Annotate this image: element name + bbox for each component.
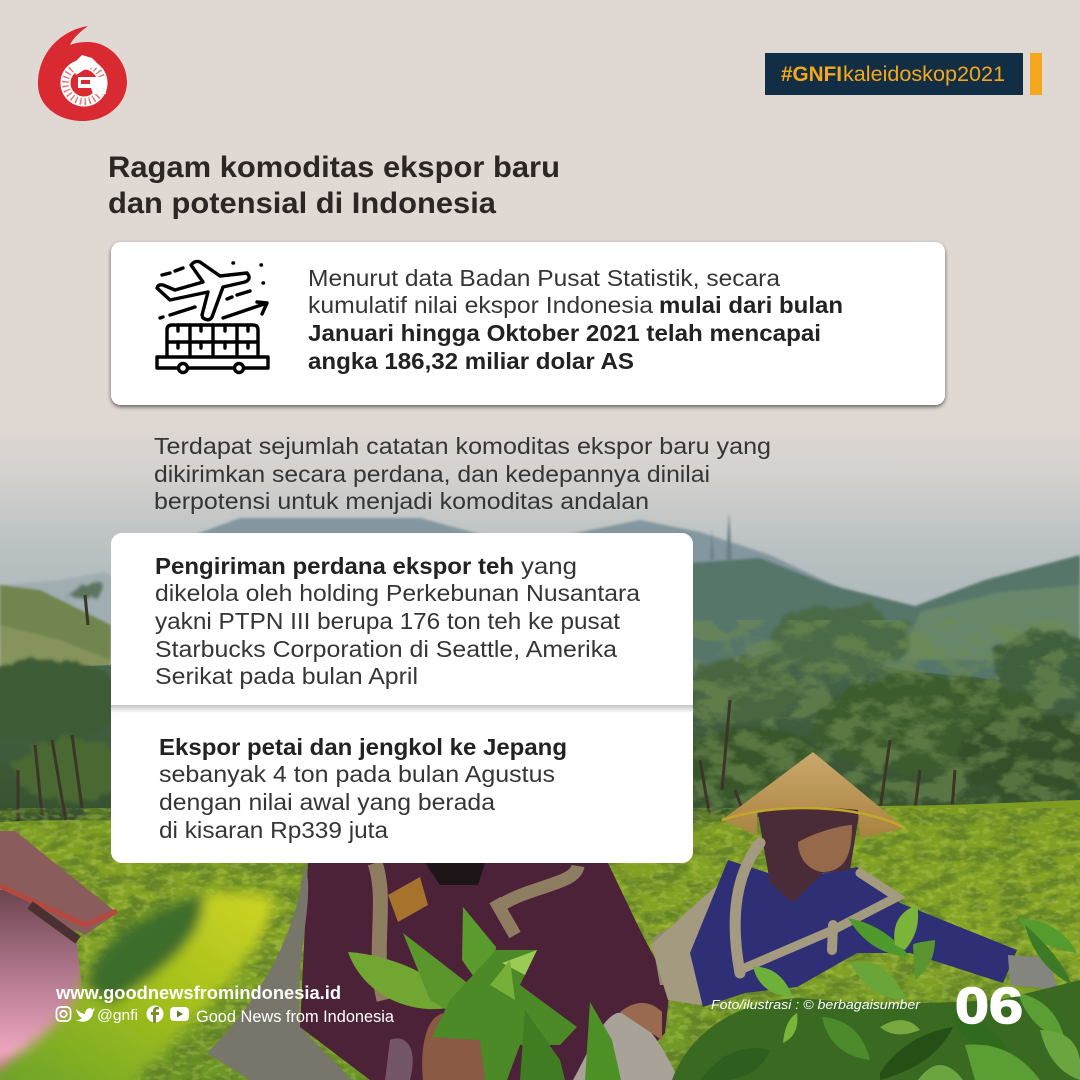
tea field [0, 800, 1080, 1080]
text: tea export: Serikat pada bulan April [155, 663, 418, 689]
photo credit: Foto/ilustrasi : © berbagaisumber [711, 998, 921, 1012]
icon: instagram [56, 1007, 70, 1021]
footer: website and social handles: www.goodnewsfromindonesia.id [55, 982, 341, 1003]
logo: GNFI red six with white garuda G [38, 26, 127, 121]
title: dan potensial di Indonesia [108, 187, 496, 220]
text: petai and jengkol export: Ekspor petai dan jengkol ke Jepang [159, 734, 567, 760]
ropes [735, 843, 897, 973]
intro paragraph: Terdapat sejumlah catatan komoditas ekspor baru yang [154, 433, 771, 459]
icon: youtube [170, 1007, 189, 1021]
hills [0, 555, 1080, 720]
photo: tea leaves bundle [348, 907, 621, 1080]
footer: website and social handles [55, 982, 395, 1026]
text: tea export: yakni PTPN III berupa 176 ton teh ke pusat [155, 608, 621, 634]
text block: Januari hingga Oktober 2021 telah mencapai [308, 320, 821, 346]
text: tea export [155, 553, 640, 689]
body [690, 860, 1017, 1007]
photo: blurred foreground leaf left [0, 893, 273, 1080]
intro paragraph: dikirimkan secara perdana, dan kedepannya dinilai [154, 461, 710, 487]
title: Ragam komoditas ekspor baru [108, 151, 560, 184]
title [108, 151, 560, 220]
icon: twitter [76, 1007, 94, 1022]
photo: centre farmer [207, 863, 690, 1080]
panel: total export value [111, 242, 945, 405]
text block: kumulatif nilai ekspor Indonesia [308, 292, 653, 318]
intro paragraph [154, 433, 771, 514]
hashtag badge [765, 53, 1042, 95]
text: tea export: Starbucks Corporation di Seattle, Amerika [155, 636, 617, 662]
hat [722, 752, 905, 838]
photo: farmer left with hat [0, 831, 117, 1080]
glove [1008, 955, 1058, 990]
text block: mulai dari bulan [659, 292, 843, 318]
page number: 06 [955, 977, 1023, 1034]
intro paragraph: berpotensi untuk menjadi komoditas andalan [154, 488, 649, 514]
mid-ground trees [0, 581, 1080, 803]
footer: website and social handles: Good News from Indonesia [196, 1008, 395, 1026]
text: tea export: Pengiriman perdana ekspor teh [155, 553, 514, 579]
face [798, 825, 852, 872]
text: petai and jengkol export: di kisaran Rp339 juta [159, 817, 388, 843]
footer: website and social handles: @gnfi [97, 1007, 138, 1024]
headscarf [757, 808, 860, 903]
text: petai and jengkol export: sebanyak 4 ton pada bulan Agustus [159, 761, 555, 787]
text: tea export: dikelola oleh holding Perkebunan Nusantara [155, 580, 640, 606]
icon: facebook [146, 1006, 164, 1023]
text: petai and jengkol export [159, 734, 567, 843]
photo: foreground tea leaves right [672, 905, 1080, 1080]
hashtag badge: kaleidoskop2021 [843, 63, 1005, 86]
carrying cloth [651, 870, 745, 1005]
hashtag badge: #GNFI [781, 63, 842, 86]
text block: Menurut data Badan Pusat Statistik, secara [308, 265, 780, 291]
distant mountains [0, 512, 840, 640]
text block [308, 265, 843, 374]
text: petai and jengkol export: dengan nilai awal yang berada [159, 789, 495, 815]
tree trunks [18, 595, 955, 835]
icon: airplane and cargo [157, 261, 268, 372]
text block: angka 186,32 miliar dolar AS [308, 348, 634, 374]
tree mass backdrop [690, 640, 1080, 830]
text: tea export: yang [521, 553, 577, 579]
panel: new export commodities [111, 533, 693, 863]
photo: farmer right with conical hat [651, 752, 1058, 1007]
